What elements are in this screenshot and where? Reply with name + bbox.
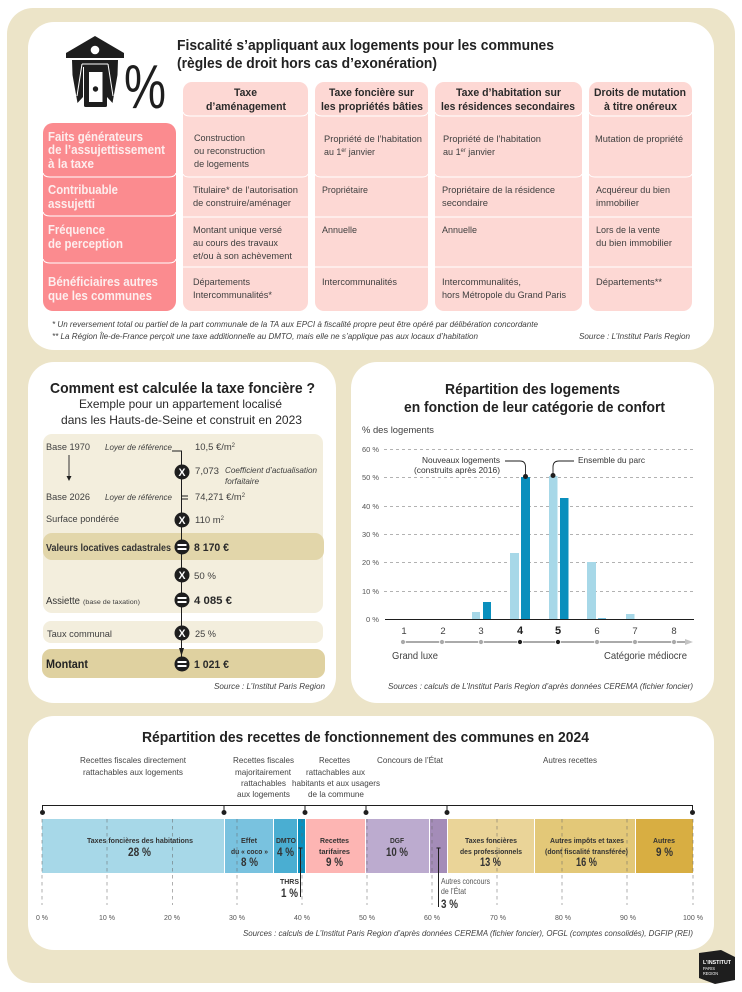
panel: calcul de la taxe foncière xyxy=(28,362,336,703)
group labels: rattachables xyxy=(241,778,286,788)
column: taxe d'aménagement: Titulaire* de l’autorisation xyxy=(193,185,298,196)
percentage axis labels: 60 % xyxy=(424,913,440,922)
light bars: ensemble du parc xyxy=(472,476,634,619)
row: montant xyxy=(46,656,229,672)
y axis title: % des logements xyxy=(362,425,434,436)
column: droits de mutation: du bien immobilier xyxy=(596,238,672,249)
panel: répartition des recettes xyxy=(28,716,714,950)
segment labels: 9 % xyxy=(656,847,673,859)
column: taxe d'aménagement: ou reconstruction xyxy=(194,146,265,157)
heading: Comment est calculée la taxe foncière ? xyxy=(50,380,315,397)
percentage axis labels: 50 % xyxy=(359,913,375,922)
group labels: rattachables aux xyxy=(306,767,366,777)
callout: autres concours de l'État xyxy=(436,848,490,911)
row: base 1970: 2 xyxy=(232,443,236,449)
column: droits de mutation: Acquéreur du bien xyxy=(596,185,670,196)
column: taxe foncière: Propriétaire xyxy=(322,185,368,196)
y axis labels: 30 % xyxy=(362,530,379,539)
column: taxe d'aménagement: au cours des travaux xyxy=(193,238,278,249)
confort scale: 6 xyxy=(594,626,600,637)
percentage grid lines xyxy=(42,819,693,905)
heading: Répartition des recettes de fonctionnement des communes en 2024 xyxy=(142,729,590,746)
percentage axis labels: 0 % xyxy=(36,913,48,922)
column: taxe d'habitation: Taxe d’habitation sur xyxy=(456,87,562,99)
group labels: Recettes fiscales xyxy=(233,755,294,765)
footnotes and source: ** La Région Île-de-France perçoit une taxe additionnelle au DMTO, mais elle ne s’applique pas aux locaux d’habitation xyxy=(52,331,478,341)
row: base 1970: Loyer de référence xyxy=(105,442,172,452)
row: base 1970: Base 1970 xyxy=(46,442,90,453)
callout: THRS xyxy=(280,848,302,900)
group labels: Recettes fiscales directement xyxy=(80,755,187,765)
row: surface pondérée xyxy=(46,512,225,528)
segment labels: 10 % xyxy=(386,847,408,859)
row: base 2026: Base 2026 xyxy=(46,492,90,503)
row headers: de l’assujettissement xyxy=(48,143,166,157)
heading: Répartition des logements xyxy=(445,381,620,398)
callout: nouveaux logements: Nouveaux logements xyxy=(422,455,500,465)
row: base 2026 xyxy=(46,492,246,503)
row headers: à la taxe xyxy=(48,157,94,171)
source: Source : L’Institut Paris Region xyxy=(214,681,325,691)
icon: house with banknote and percent xyxy=(66,36,166,122)
row: surface pondérée: 110 m xyxy=(195,515,221,526)
confort scale: 4 xyxy=(517,625,524,637)
column: taxe d'habitation: hors Métropole du Grand Paris xyxy=(442,290,566,301)
percentage axis labels: 30 % xyxy=(229,913,245,922)
column: taxe d'aménagement: de logements xyxy=(194,159,249,170)
column: taxe foncière: er xyxy=(341,148,346,154)
column: droits de mutation: Lors de la vente xyxy=(596,225,660,236)
segment labels: DGF xyxy=(390,836,404,845)
y axis labels xyxy=(362,445,379,624)
callout: autres concours de l'État: de l’État xyxy=(441,887,467,896)
row: base 2026: 74,271 €/m xyxy=(195,492,243,503)
column: taxe d'habitation: Propriétaire de la résidence xyxy=(442,185,555,196)
column: taxe d'habitation: Annuelle xyxy=(442,225,477,236)
stacked bar xyxy=(42,819,693,873)
row: taux communal: X xyxy=(178,628,186,640)
row headers: assujetti xyxy=(48,197,95,211)
column: taxe d'aménagement: de construire/aménager xyxy=(193,198,291,209)
arrow heads xyxy=(66,465,184,656)
confort scale: 1 xyxy=(401,626,407,637)
column: taxe d'aménagement: Construction xyxy=(194,133,245,144)
percentage axis labels: 20 % xyxy=(164,913,180,922)
row: coefficient: forfaitaire xyxy=(225,476,259,486)
column: taxe d'habitation: au 1 xyxy=(443,147,462,158)
row: taux communal: 25 % xyxy=(195,629,217,640)
row headers: Contribuable xyxy=(48,183,118,197)
group labels: de la commune xyxy=(308,789,364,799)
segment labels: Effet xyxy=(241,836,257,845)
footnotes and source: Source : L’Institut Paris Region xyxy=(579,331,690,341)
column: taxe foncière: les propriétés bâties xyxy=(321,101,423,113)
dark bars: nouveaux logements xyxy=(483,477,606,619)
segment labels: 28 % xyxy=(128,847,151,859)
source: Sources : calculs de L’Institut Paris Region d’après données CEREMA (fichier foncier) xyxy=(388,681,693,691)
segment labels: DMTO xyxy=(276,836,296,845)
title xyxy=(177,37,554,72)
footnotes and source xyxy=(52,319,690,341)
y axis labels: 0 % xyxy=(366,615,379,624)
row: 50 %: X xyxy=(178,570,186,582)
column: droits de mutation xyxy=(589,82,692,311)
heading: dans les Hauts-de-Seine et construit en 2023 xyxy=(61,413,302,427)
callout: autres concours de l'État: Autres concours xyxy=(441,877,490,886)
column: taxe foncière: Propriété de l’habitation xyxy=(324,134,422,145)
row: coefficient: 7,073 xyxy=(195,466,219,477)
confort scale: 8 xyxy=(671,626,677,637)
group labels: habitants et aux usagers xyxy=(292,778,380,788)
logo: L'Institut Paris Region xyxy=(699,950,735,984)
column: taxe foncière: janvier xyxy=(346,147,375,158)
percentage axis labels xyxy=(36,913,703,922)
row: surface pondérée: 2 xyxy=(221,516,225,522)
heading xyxy=(404,381,665,416)
segment labels: 4 % xyxy=(277,847,294,859)
row headers: Fréquence xyxy=(48,223,105,237)
panel: fiscalité table xyxy=(28,22,714,350)
column: taxe foncière xyxy=(315,82,428,311)
footnotes and source: * Un reversement total ou partiel de la part communale de la TA aux EPCI à fiscalité propre peut être opéré par délibération concordante xyxy=(52,319,538,329)
row headers xyxy=(43,123,176,311)
segment labels: 8 % xyxy=(241,857,258,869)
row: base 1970 xyxy=(46,442,236,453)
segment labels: Autres impôts et taxes xyxy=(550,836,624,845)
row headers: Faits générateurs xyxy=(48,130,143,144)
row: base 2026: Loyer de référence xyxy=(105,492,172,502)
panel: répartition des logements xyxy=(351,362,714,703)
column: droits de mutation: à titre onéreux xyxy=(604,101,678,113)
row: assiette: 4 085 € xyxy=(194,595,232,607)
confort scale: 3 xyxy=(478,626,484,637)
column: taxe d'habitation: Intercommunalités, xyxy=(442,277,521,288)
segment labels: du « coco » xyxy=(231,847,268,856)
row: taux communal xyxy=(47,626,217,640)
group labels: Recettes xyxy=(319,755,350,765)
y axis labels: 60 % xyxy=(362,445,379,454)
segment labels xyxy=(87,836,675,869)
column: taxe foncière: au 1 xyxy=(324,147,342,158)
percentage axis labels: 80 % xyxy=(555,913,571,922)
callout: ensemble du parc xyxy=(550,455,646,478)
row: montant: Montant xyxy=(46,657,88,671)
row: base 2026: 2 xyxy=(242,493,246,499)
segment labels: 13 % xyxy=(480,857,501,869)
callout: THRS: 1 % xyxy=(281,888,298,900)
row: assiette: Assiette xyxy=(46,596,80,607)
confort scale: 7 xyxy=(632,626,638,637)
column: droits de mutation: Mutation de propriété xyxy=(595,134,683,145)
y axis labels: 20 % xyxy=(362,558,379,567)
row: coefficient: X xyxy=(178,467,186,479)
callout: nouveaux logements: (construits après 2016) xyxy=(414,465,500,475)
percentage axis labels: 90 % xyxy=(620,913,636,922)
row: assiette xyxy=(46,592,232,608)
row: assiette: (base de taxation) xyxy=(83,599,140,606)
column: taxe d'habitation: les résidences secondaires xyxy=(441,101,575,113)
callout: THRS: THRS xyxy=(280,877,299,886)
calculation backgrounds xyxy=(42,434,325,678)
title: Fiscalité s’appliquant aux logements pour les communes xyxy=(177,37,554,54)
segment labels: Recettes xyxy=(320,836,349,845)
column: taxe d'habitation: er xyxy=(461,148,466,154)
segment labels: 9 % xyxy=(326,857,343,869)
row headers: de perception xyxy=(48,237,123,251)
callout: nouveaux logements xyxy=(414,455,528,479)
y axis labels: 50 % xyxy=(362,473,379,482)
row: surface pondérée: Surface pondérée xyxy=(46,514,119,525)
segment labels: (dont fiscalité transférée) xyxy=(545,847,628,856)
column: taxe d'aménagement: Taxe xyxy=(234,87,257,99)
icon: house with banknote and percent: % xyxy=(124,53,166,122)
logo: L'Institut Paris Region: L’INSTITUT xyxy=(703,960,732,966)
row: valeurs locatives cadastrales: 8 170 € xyxy=(194,542,229,554)
heading: Exemple pour un appartement localisé xyxy=(79,397,282,411)
column: taxe d'aménagement: d’aménagement xyxy=(206,101,286,113)
segment labels: des professionnels xyxy=(460,847,522,856)
segment labels: tarifaires xyxy=(319,847,350,856)
logo: L'Institut Paris Region: REGION xyxy=(703,971,718,976)
column: droits de mutation: Départements** xyxy=(596,277,662,288)
logo: L'Institut Paris Region: PARIS xyxy=(703,966,715,971)
bracket xyxy=(40,806,695,815)
heading xyxy=(50,380,315,427)
column: taxe d'aménagement: et/ou à son achèvement xyxy=(193,251,292,262)
column: taxe foncière: Annuelle xyxy=(322,225,357,236)
flow line xyxy=(69,451,182,668)
group labels xyxy=(80,755,597,799)
column: taxe d'habitation: Propriété de l’habitation xyxy=(443,134,541,145)
source: Sources : calculs de L’Institut Paris Region d’après données CEREMA (fichier foncier), OFGL (comptes consolidés), DGFIP (REI) xyxy=(243,928,693,938)
row: valeurs locatives cadastrales xyxy=(46,540,229,554)
column: taxe d'aménagement: Intercommunalités* xyxy=(193,290,272,301)
confort scale: Catégorie médiocre xyxy=(604,650,687,662)
column: taxe d'habitation xyxy=(435,82,582,311)
y axis labels: 10 % xyxy=(362,587,379,596)
row: base 1970: 10,5 €/m xyxy=(195,442,232,453)
row: coefficient xyxy=(174,464,317,486)
percentage axis labels: 10 % xyxy=(99,913,115,922)
confort scale: 5 xyxy=(555,625,561,637)
column: taxe d'habitation: secondaire xyxy=(442,198,488,209)
column: taxe foncière: Intercommunalités xyxy=(322,277,397,288)
row: 50 %: 50 % xyxy=(194,571,217,582)
row headers: Bénéficiaires autres xyxy=(48,275,158,289)
column: droits de mutation: Droits de mutation xyxy=(594,87,686,99)
column: taxe d'aménagement: Départements xyxy=(193,277,250,288)
segment labels: 16 % xyxy=(576,857,597,869)
heading: en fonction de leur catégorie de confort xyxy=(404,399,665,416)
confort scale: Grand luxe xyxy=(392,650,438,662)
title: (règles de droit hors cas d’exonération) xyxy=(177,55,437,72)
group labels: aux logements xyxy=(237,789,290,799)
percentage axis labels: 100 % xyxy=(683,913,703,922)
group labels: majoritairement xyxy=(235,767,292,777)
percentage axis labels: 40 % xyxy=(294,913,310,922)
segment labels: Taxes foncières des habitations xyxy=(87,836,193,845)
group labels: rattachables aux logements xyxy=(83,767,183,777)
percentage axis labels: 70 % xyxy=(490,913,506,922)
group labels: Autres recettes xyxy=(543,755,597,765)
segment labels: Taxes foncières xyxy=(465,836,517,845)
row: surface pondérée: X xyxy=(178,515,186,527)
bar chart xyxy=(362,445,694,624)
y axis labels: 40 % xyxy=(362,502,379,511)
column: taxe d'aménagement: Montant unique versé xyxy=(193,225,282,236)
row: montant: 1 021 € xyxy=(194,659,229,671)
row: valeurs locatives cadastrales: Valeurs locatives cadastrales xyxy=(46,543,171,554)
callout: autres concours de l'État: 3 % xyxy=(441,899,458,911)
column: taxe d'aménagement xyxy=(183,82,308,311)
row headers: que les communes xyxy=(48,289,152,303)
row: coefficient: Coefficient d’actualisation xyxy=(225,465,317,475)
callout: ensemble du parc: Ensemble du parc xyxy=(578,455,646,465)
column: taxe d'habitation: janvier xyxy=(466,147,495,158)
row: taux communal: Taux communal xyxy=(47,629,112,640)
confort scale xyxy=(392,625,693,662)
column: taxe foncière: Taxe foncière sur xyxy=(329,87,415,99)
group labels: Concours de l’État xyxy=(377,755,444,765)
confort scale: 2 xyxy=(440,626,446,637)
segment labels: Autres xyxy=(653,836,675,845)
column: droits de mutation: immobilier xyxy=(596,198,639,209)
row: 50 % xyxy=(174,568,217,582)
